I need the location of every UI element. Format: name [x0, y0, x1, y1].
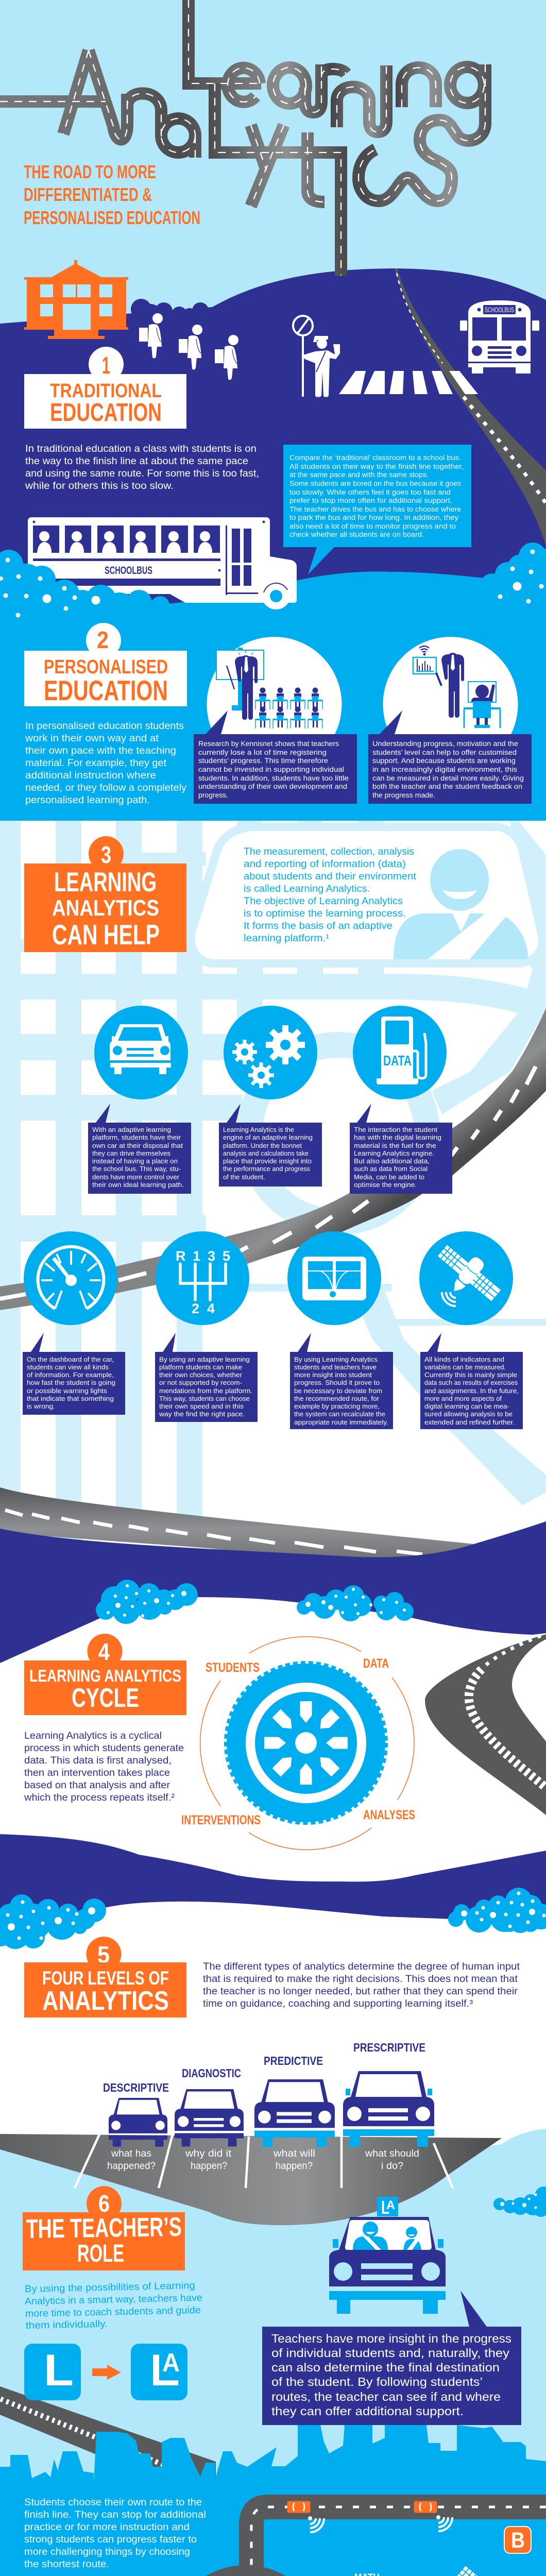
- text: coaching students: Analytics in a smart way, teachers have: [25, 2293, 202, 2307]
- callout: gears and choices: way the find the right pace.: [159, 1411, 245, 1418]
- callout: navigation route: the system can recalculate the: [294, 1411, 385, 1418]
- background: grid of light streets: [0, 821, 546, 1552]
- callout: analytics as engine: engine of an adaptive learning: [223, 1134, 313, 1141]
- callout: interaction as fuel: The interaction the student: [354, 1126, 438, 1133]
- text: definition of learning analytics: is called Learning Analytics.: [244, 884, 370, 894]
- icon: gears: [224, 1006, 317, 1099]
- icon: navigation device: [287, 1231, 381, 1325]
- callout: analytics as engine: [219, 1104, 322, 1187]
- callout: understanding progress: students’ level can help to offer customised: [372, 749, 517, 756]
- heading: four levels of analytics: [24, 1962, 186, 2018]
- callout: indicators: more and more aspects of: [424, 1395, 502, 1402]
- icon: L plate to LA plate: L: [44, 2346, 74, 2395]
- callout: adaptive platform car: they can drive themselves: [92, 1150, 170, 1157]
- road in section 5: [0, 2134, 502, 2225]
- callout: dashboard: that indicate that something: [27, 1395, 114, 1402]
- heading: learning analytics cycle: LEARNING ANALYTICS: [29, 1666, 181, 1685]
- section 2: personalised education: [24, 623, 532, 806]
- number badge 6: [87, 2186, 122, 2221]
- callout: analytics as engine: analysis and calculations take: [223, 1150, 309, 1157]
- background: bright blue hill: [0, 571, 546, 821]
- callout: indicators: [420, 1333, 523, 1429]
- text: traditional education intro: In traditional education a class with students is on: [25, 444, 257, 454]
- background: navy hill: [0, 268, 546, 670]
- callout: teacher insight: [262, 2291, 521, 2425]
- illustration: classroom teacher: [207, 637, 342, 734]
- clouds above cycle right: [297, 1585, 414, 1621]
- chart: wheel cycle: ANALYSES: [363, 1808, 415, 1822]
- text: personalised education intro: [25, 721, 187, 806]
- small cloud right: [493, 2187, 546, 2217]
- callout: analytics as engine: of the student.: [223, 1174, 265, 1181]
- heading: learning analytics cycle: CYCLE: [72, 1683, 139, 1713]
- text: lane questions: happen?: [191, 2161, 227, 2172]
- text: lane questions: why did it: [185, 2148, 232, 2159]
- section city: skyline: [0, 2425, 546, 2576]
- car: prescriptive: [343, 2071, 434, 2147]
- clouds right: [448, 1888, 546, 1933]
- section 4: learning analytics cycle: [24, 1580, 546, 1850]
- text: coaching students: more time to coach students and guide: [25, 2305, 201, 2319]
- text: personalised education intro: needed, or they follow a completely: [25, 783, 187, 793]
- number badge 3: 3: [101, 841, 111, 868]
- icon: school bus front: SCHOOLBUS: [485, 306, 514, 314]
- trees right: [481, 543, 546, 604]
- callout: gears and choices: platform students can make: [159, 1364, 242, 1371]
- text: definition of learning analytics: about students and their environment: [244, 871, 417, 882]
- top-down cars on the map: [90, 2501, 437, 2576]
- illustration: LA learner car: L: [381, 2197, 389, 2218]
- callout: understanding progress: [368, 710, 532, 804]
- callout: analytics as engine: platform. Under the bonnet: [223, 1142, 302, 1149]
- illustration: LA learner car: [329, 2197, 446, 2314]
- heading: traditional education: [24, 374, 186, 429]
- icon: L plate to LA plate: A: [162, 2348, 180, 2377]
- heading: the teacher's role: THE TEACHER’S: [26, 2212, 182, 2244]
- callout: interaction as fuel: But also additional data,: [354, 1158, 430, 1165]
- heading: the teacher's role: [23, 2212, 185, 2270]
- callout: adaptive platform car: platform, students have their: [92, 1134, 181, 1141]
- callout: adaptive platform car: their own ideal learning path.: [92, 1181, 184, 1189]
- callout: school bus comparison: Some students are bored on the bus because it goes: [289, 480, 461, 487]
- text: traditional education intro: the way to the finish line at about the same pace: [25, 456, 248, 467]
- callout: school bus comparison: check whether all students are on board.: [289, 531, 424, 538]
- section 6: the teacher's role: [23, 2186, 546, 2425]
- callout: dashboard: On the dashboard of the car,: [27, 1356, 114, 1363]
- subtitle: PERSONALISED EDUCATION: [24, 207, 200, 228]
- callout: understanding progress: both the teacher and the student feedback on: [372, 783, 522, 790]
- callout: adaptive platform car: With an adaptive learning: [92, 1126, 171, 1133]
- callout: research by Kennisnet: progress.: [198, 791, 228, 799]
- callout: dashboard: how fast the student is going: [27, 1379, 115, 1386]
- road over the hill: [395, 268, 546, 546]
- callout: dashboard: or possible warning lights: [27, 1387, 107, 1395]
- heading: learning analytics can help: ANALYTICS: [52, 895, 159, 921]
- text: cycle description: data. This data is first analysed,: [24, 1755, 172, 1766]
- heading: learning analytics can help: [24, 863, 186, 952]
- text: coaching students: [25, 2280, 202, 2331]
- marker B: [504, 2527, 531, 2553]
- text: definition of learning analytics: The objective of Learning Analytics: [244, 896, 403, 907]
- section 1: traditional education: [0, 260, 546, 623]
- callout: analytics as engine: the performance and progress: [223, 1165, 310, 1173]
- callout: school bus comparison: also need a lot of time to monitor progress and to: [289, 522, 456, 530]
- heading: personalised education: EDUCATION: [44, 674, 168, 706]
- callout: navigation route: the recommended route, for: [294, 1395, 379, 1402]
- text: students choose route: [24, 2497, 206, 2570]
- callout: indicators: Currently this is mainly simple: [424, 1371, 517, 1379]
- callout: indicators: digital learning can be mea-: [424, 1403, 509, 1410]
- callout: research by Kennisnet: students’ progress. This time therefore: [198, 757, 328, 765]
- callout: research by Kennisnet: students. In addition, students have too little: [198, 774, 349, 782]
- car: diagnostic: [175, 2089, 244, 2146]
- text: coaching students: By using the possibilities of Learning: [25, 2280, 195, 2295]
- icon: walking students: [139, 313, 240, 380]
- text: students choose route: more challenging things by choosing: [24, 2547, 190, 2557]
- callout: dashboard: [23, 1333, 125, 1415]
- callout: adaptive platform car: dents have more control over: [92, 1174, 179, 1181]
- callout: teacher insight: can also determine the final destination: [271, 2361, 500, 2374]
- number badge 1: 1: [102, 352, 110, 379]
- text: personalised education intro: work in their own way and at: [25, 733, 159, 744]
- background: sky: [0, 0, 546, 412]
- callout: interaction as fuel: material is the fuel for the: [354, 1142, 436, 1149]
- callout: navigation route: more insight into student: [294, 1371, 372, 1379]
- marker B: B: [511, 2528, 525, 2553]
- text: types of analytics: that is required to make the right decisions. This does not mean that: [203, 1974, 518, 1985]
- illustration: smiling driver: [394, 849, 528, 959]
- callout: indicators: data such as results of exercises: [424, 1379, 518, 1386]
- text: traditional education intro: and using the same route. For some this is too fast,: [25, 468, 259, 479]
- icon: school bus front: [460, 300, 539, 374]
- text: cycle description: then an intervention takes place: [24, 1768, 170, 1778]
- callout: adaptive platform car: the school bus. This way, stu-: [92, 1165, 181, 1173]
- icon: L plate to LA plate: [24, 2344, 187, 2400]
- callout: gears and choices: By using an adaptive learning: [159, 1356, 250, 1363]
- callout: interaction as fuel: such as data from Social: [354, 1165, 428, 1173]
- text: personalised education intro: their own pace with the teaching: [25, 745, 176, 756]
- heading: traditional education: TRADITIONAL: [50, 380, 162, 402]
- callout: navigation route: By using Learning Analytics: [294, 1356, 378, 1363]
- subtitle: THE ROAD TO MORE: [24, 161, 156, 182]
- section 5: four levels of analytics: [0, 1888, 546, 2188]
- windshield panel: [195, 831, 538, 959]
- callout: gears and choices: their own choices, whether: [159, 1371, 242, 1379]
- heading: learning analytics cycle: [24, 1660, 186, 1715]
- text: lane questions: i do?: [381, 2161, 403, 2172]
- callout: indicators: sured allowing analysis to be: [424, 1411, 513, 1418]
- callout: interaction as fuel: Media, can be added to: [354, 1174, 424, 1181]
- callout: indicators: extended and refined further.: [424, 1419, 515, 1426]
- callout: teacher insight: of individual students and, naturally, they: [271, 2346, 510, 2360]
- number badge 1: [89, 347, 124, 382]
- callout: navigation route: be necessary to deviate from: [294, 1387, 382, 1395]
- callout: navigation route: appropriate route immediately.: [294, 1419, 388, 1426]
- section: route map: [24, 2497, 546, 2576]
- callout: gears and choices: mendations from the platform.: [159, 1387, 252, 1395]
- icon: crossing guard with stop sign: [293, 316, 340, 397]
- callout: interaction as fuel: [350, 1104, 452, 1194]
- icon: school building: [24, 260, 128, 339]
- heading: four levels of analytics: FOUR LEVELS OF: [42, 1968, 169, 1989]
- callout: school bus comparison: Compare the ‘traditional’ classroom to a school bus.: [289, 454, 461, 462]
- icon: data fuel pump: DATA: [383, 1053, 412, 1069]
- text: traditional education intro: while for others this is too slow.: [25, 481, 174, 492]
- text: coaching students: them individually.: [26, 2319, 108, 2331]
- icon: gear shift: [156, 1231, 249, 1325]
- icon: school bus side view: SCHOOLBUS: [105, 565, 152, 577]
- callout: school bus comparison: The teacher drives the bus and has to choose where: [289, 505, 461, 513]
- text: personalised education intro: personalised learning path.: [25, 795, 150, 806]
- text: students choose route: finish line. They can stop for additional: [24, 2510, 206, 2520]
- icon: car: [94, 1006, 188, 1099]
- callout: research by Kennisnet: cannot be invested in supporting individual: [198, 766, 344, 773]
- title: Learning Analytics road lettering: [0, 0, 485, 276]
- callout: school bus comparison: too slowly. While others feel it goes too fast and: [289, 488, 451, 496]
- callout: gears and choices: This way, students can choose: [159, 1395, 250, 1402]
- icon: gear shift: 2 4: [192, 1301, 215, 1316]
- diagonal road section 6: [0, 2386, 216, 2504]
- callout: navigation route: [290, 1333, 393, 1429]
- callout: dashboard: students can view all kinds: [27, 1364, 109, 1371]
- callout: adaptive platform car: own car at their disposal that: [92, 1142, 183, 1149]
- chart: wheel cycle: DATA: [363, 1656, 389, 1671]
- car: predictive: [254, 2079, 335, 2147]
- number badge 4: [88, 1634, 123, 1669]
- callout: research by Kennisnet: Research by Kennisnet shows that teachers: [198, 740, 339, 748]
- subtitle: [24, 161, 200, 228]
- icon: school bus side view: [28, 517, 297, 609]
- callout: analytics as engine: Learning Analytics is the: [223, 1126, 294, 1133]
- heading: the teacher's role: ROLE: [77, 2240, 124, 2267]
- number badge 2: [86, 623, 121, 658]
- second road stretch: [0, 1487, 474, 1564]
- callout: research by Kennisnet: understanding of their own development and: [198, 783, 347, 790]
- crosswalk: [339, 371, 478, 394]
- number badge 6: 6: [98, 2190, 110, 2217]
- callout: research by Kennisnet: currently lose a lot of time registering: [198, 749, 327, 756]
- callout: interaction as fuel: optimise the engine.: [354, 1181, 417, 1189]
- chart: wheel cycle: INTERVENTIONS: [181, 1813, 261, 1827]
- text: personalised education intro: material. For example, they get: [25, 758, 167, 769]
- callout: research by Kennisnet: [194, 710, 357, 804]
- icon: data fuel pump: [353, 1006, 447, 1099]
- illustration: teacher with tablet and student: [383, 637, 518, 734]
- number badge 2: 2: [97, 626, 109, 653]
- callout: understanding progress: the progress made.: [372, 791, 435, 799]
- callout: understanding progress: Understanding progress, motivation and the: [372, 740, 518, 748]
- text: cycle description: Learning Analytics is a cyclical: [24, 1731, 162, 1741]
- section 3: learning analytics can help: [23, 831, 538, 1429]
- text: cycle description: [24, 1731, 184, 1803]
- text: traditional education intro: [25, 444, 259, 492]
- road on the right: [425, 1634, 546, 1815]
- text: personalised education intro: additional instruction where: [25, 770, 156, 781]
- car: descriptive: [109, 2098, 167, 2147]
- callout: school bus comparison: prefer to stop more often for additional support.: [289, 497, 452, 504]
- callout: school bus comparison: to park the bus and for how long. In addition, they: [289, 514, 458, 521]
- text: definition of learning analytics: [244, 846, 417, 944]
- callout: teacher insight: of the student. By following students’: [271, 2375, 483, 2388]
- number badge 5: 5: [97, 1941, 110, 1968]
- text: lane questions: what should: [365, 2148, 419, 2159]
- text: definition of learning analytics: It forms the basis of an adaptive: [244, 921, 393, 931]
- callout: adaptive platform car: [88, 1104, 191, 1194]
- illustration: LA learner car: A: [386, 2198, 395, 2212]
- text: students choose route: practice or for more instruction and: [24, 2522, 190, 2533]
- clouds left: [0, 1894, 106, 1949]
- heading: personalised education: [24, 651, 187, 706]
- text: types of analytics: time on guidance, coaching and supporting learning itself.³: [203, 1998, 473, 2009]
- text: definition of learning analytics: and reporting of information (data): [244, 859, 406, 870]
- icon: satellite: [419, 1231, 513, 1325]
- callout: school bus comparison: [283, 445, 471, 574]
- callout: adaptive platform car: instead of having a place on: [92, 1158, 178, 1165]
- callout: navigation route: example by practicing more,: [294, 1403, 380, 1410]
- text: definition of learning analytics: learning platform.¹: [244, 933, 329, 944]
- background: light blue section 6: [0, 2129, 546, 2488]
- callout: indicators: All kinds of indicators and: [424, 1356, 504, 1363]
- heading: learning analytics can help: LEARNING: [54, 867, 157, 897]
- label: predictive: PREDICTIVE: [264, 2054, 323, 2067]
- background: white section 4 valley: [0, 1597, 546, 1882]
- lane lines: [75, 2134, 453, 2188]
- background: white section 5: [0, 1902, 546, 2164]
- text: students choose route: strong students can progress faster to: [24, 2534, 197, 2545]
- callout: teacher insight: they can offer additional support.: [271, 2404, 464, 2418]
- text: types of analytics: The different types of analytics determine the degree of human input: [203, 1961, 520, 1972]
- callout: understanding progress: support. And because students are working: [372, 757, 516, 765]
- number badge 3: [89, 836, 124, 871]
- subtitle: DIFFERENTIATED &: [24, 184, 152, 205]
- label: diagnostic: DIAGNOSTIC: [182, 2066, 241, 2080]
- number badge 5: [87, 1937, 122, 1972]
- callout: dashboard: is wrong.: [27, 1403, 55, 1410]
- callout: indicators: and assignments. In the future,: [424, 1387, 519, 1395]
- text: lane questions: what has: [111, 2148, 151, 2159]
- chart: wheel cycle: STUDENTS: [206, 1660, 260, 1675]
- icon: speedometer: [24, 1231, 117, 1325]
- callout: gears and choices: [155, 1333, 258, 1422]
- curving road across section 3: [0, 1008, 546, 1310]
- label: descriptive: DESCRIPTIVE: [103, 2081, 169, 2094]
- callout: interaction as fuel: Learning Analytics engine.: [354, 1150, 434, 1157]
- callout: school bus comparison: at the same pace and with the same stops.: [289, 471, 429, 479]
- clouds above cycle left: [96, 1580, 198, 1624]
- callout: gears and choices: their own speed and in this: [159, 1403, 244, 1410]
- text: cycle description: based on that analysis and after: [24, 1780, 170, 1791]
- road map: [96, 2507, 546, 2576]
- text: lane questions: happened?: [107, 2161, 156, 2172]
- wifi signals: [105, 2515, 452, 2576]
- heading: four levels of analytics: ANALYTICS: [42, 1986, 169, 2016]
- icon: gear shift: R 1 3 5: [176, 1248, 230, 1264]
- heading: learning analytics can help: CAN HELP: [52, 919, 160, 951]
- callout: understanding progress: can be measured in detail more easily. Giving: [372, 774, 524, 782]
- callout: school bus comparison: All students on their way to the finish line together,: [289, 463, 464, 470]
- text: definition of learning analytics: is to optimise the learning process.: [244, 908, 406, 919]
- text: cycle description: which the process repeats itself.²: [24, 1792, 175, 1803]
- callout: indicators: variables can be measured.: [424, 1364, 506, 1371]
- heading: personalised education: PERSONALISED: [44, 656, 168, 678]
- text: lane questions: happen?: [276, 2161, 313, 2172]
- text: students choose route: the shortest route.: [24, 2559, 109, 2570]
- callout: navigation route: progress. Should it prove to: [294, 1379, 380, 1386]
- callout: teacher insight: routes, the teacher can see if and where: [271, 2390, 501, 2403]
- icon: L plate to LA plate: L: [150, 2346, 180, 2395]
- callout: navigation route: students and teachers have: [294, 1364, 377, 1371]
- text: lane questions: what will: [273, 2148, 315, 2159]
- text: lane questions: [107, 2148, 419, 2172]
- callout: teacher insight: Teachers have more insight in the progress: [271, 2332, 511, 2345]
- text: students choose route: Students choose their own route to the: [24, 2497, 202, 2508]
- text: cycle description: process in which students generate: [24, 1743, 184, 1754]
- text: definition of learning analytics: The measurement, collection, analysis: [244, 846, 414, 857]
- callout: interaction as fuel: has with the digital learning: [354, 1134, 441, 1141]
- background: navy band and clouds: [0, 1521, 546, 1937]
- callout: dashboard: of information. For example,: [27, 1371, 114, 1379]
- trees left: [0, 550, 169, 623]
- number badge 4: 4: [98, 1638, 110, 1665]
- text: types of analytics: the teacher is no longer needed, but rather that they can spend their: [203, 1986, 518, 1997]
- callout: analytics as engine: place that provide insight into: [223, 1158, 312, 1165]
- callout: understanding progress: in an increasingly digital environment, this: [372, 766, 517, 773]
- callout: gears and choices: or not supported by recom-: [159, 1379, 242, 1386]
- label: prescriptive: PRESCRIPTIVE: [353, 2041, 425, 2054]
- text: types of analytics: [203, 1961, 520, 2009]
- icon: satellite on map: [446, 2558, 526, 2576]
- chart: wheel cycle: [181, 1637, 415, 1850]
- heading: traditional education: EDUCATION: [50, 399, 162, 427]
- text: personalised education intro: In personalised education students: [25, 721, 184, 732]
